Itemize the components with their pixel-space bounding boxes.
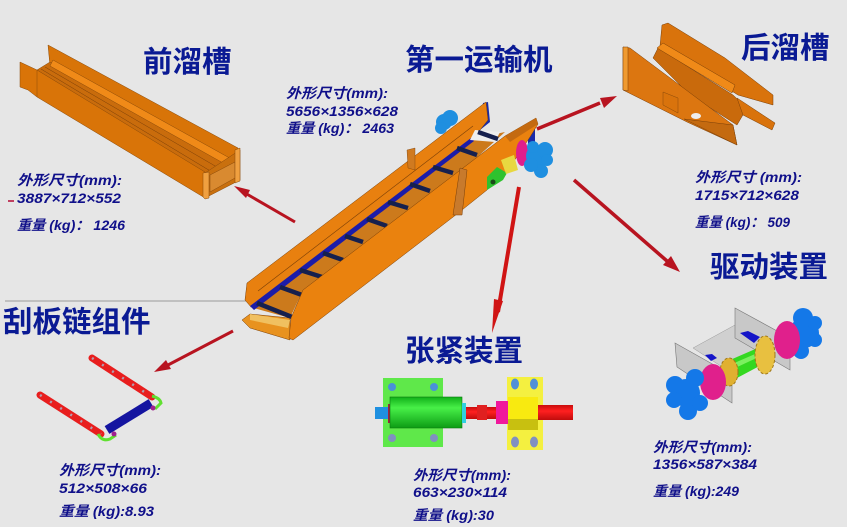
arrow: to rear chute: [537, 96, 617, 129]
panel: scraper chain: [3, 306, 161, 519]
specs: first conveyor: 重量 (kg)： 2463: [286, 120, 394, 136]
specs: rear chute: 重量 (kg)： 509: [695, 214, 790, 230]
specs: front chute: 重量 (kg)： 1246: [17, 217, 125, 233]
green shaft: [730, 347, 767, 378]
specs: scraper chain: 外形尺寸(mm):: [59, 462, 161, 478]
specs: drive unit: 1356×587×384: [653, 456, 757, 472]
yellow coupling: [501, 155, 518, 174]
specs: front chute: 外形尺寸(mm):: [17, 172, 122, 188]
front lip: [242, 314, 290, 340]
pink disk: [516, 140, 528, 166]
specs: first conveyor: [286, 85, 398, 136]
far sprocket: [435, 110, 458, 134]
illustration: drive unit: [666, 308, 822, 420]
specs: rear chute: [695, 169, 802, 230]
specs: tensioner: 外形尺寸(mm):: [413, 467, 511, 483]
specs: scraper chain: 512×508×66: [59, 480, 147, 496]
specs: scraper chain: [59, 462, 161, 519]
left blue sprocket: [666, 369, 708, 420]
panel: first conveyor: [242, 44, 553, 340]
specs: tensioner: 重量 (kg):30: [413, 507, 494, 523]
arrow: to drive unit: [574, 180, 680, 272]
specs: drive unit: [653, 439, 757, 499]
title: scraper chain: 刮板链组件: [3, 306, 151, 339]
arrow: to tensioner: [492, 187, 519, 333]
arrow: to front chute: [234, 186, 295, 222]
specs: first conveyor: 5656×1356×628: [286, 103, 398, 119]
illustration: front chute: [20, 45, 240, 199]
title: front chute: 前溜槽: [143, 46, 232, 79]
specs: drive unit: 重量 (kg):249: [653, 483, 739, 499]
specs: scraper chain: 重量 (kg):8.93: [59, 503, 154, 519]
pink disks: [774, 321, 800, 359]
trough floor: [250, 132, 505, 318]
gold couplings: [720, 358, 738, 386]
arrow: to scraper chain: [154, 331, 233, 372]
title: tensioner: 张紧装置: [405, 335, 523, 368]
illustration: scraper chain: [40, 358, 161, 440]
right wall: [289, 118, 538, 340]
illustration: conveyor assembly: [242, 102, 553, 340]
side bracket: [453, 168, 467, 215]
specs: front chute: 3887×712×552: [17, 190, 121, 206]
blue sprocket: [524, 141, 553, 178]
left wall: [245, 102, 488, 307]
specs: tensioner: [413, 467, 511, 523]
panel: rear chute: [623, 23, 830, 230]
title: rear chute: 后溜槽: [741, 32, 830, 65]
panel: drive unit: [653, 251, 828, 499]
panel: tensioner: [375, 335, 573, 523]
illustration: tensioner: [375, 377, 573, 450]
illustration: rear chute: [623, 23, 775, 145]
title: drive unit: 驱动装置: [710, 251, 828, 284]
specs: first conveyor: 外形尺寸(mm):: [286, 85, 388, 101]
green bearing: [487, 167, 507, 190]
specs: tensioner: 663×230×114: [413, 484, 507, 500]
specs: rear chute: 1715×712×628: [695, 187, 799, 203]
specs: front chute: [17, 172, 125, 233]
panel: front chute: [17, 45, 240, 233]
title: first conveyor: 第一运输机: [405, 44, 553, 77]
specs: rear chute: 外形尺寸 (mm):: [695, 169, 802, 185]
flight bars: [257, 132, 498, 317]
specs: drive unit: 外形尺寸(mm):: [653, 439, 752, 455]
right blue sprocket: [789, 308, 822, 359]
